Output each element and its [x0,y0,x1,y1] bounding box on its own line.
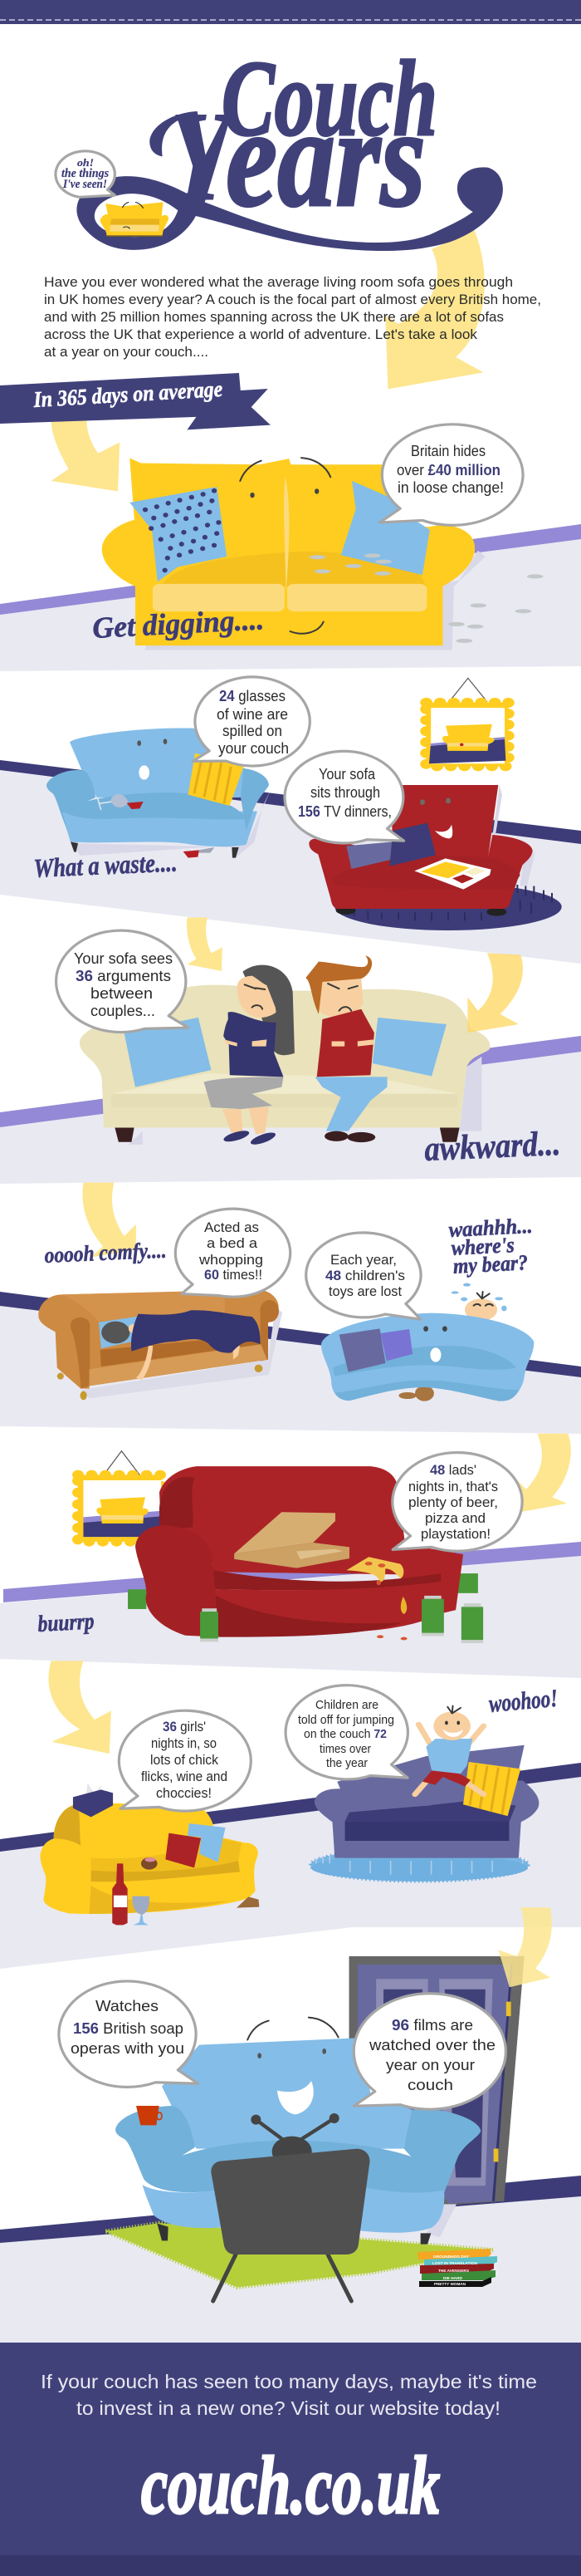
picture frame [78,1451,161,1542]
woman with crossed arms [204,965,295,1147]
beer cans behind sofa [128,1573,478,1609]
panel: arguments [56,917,561,1169]
caption: get digging: Get digging.... [91,602,265,645]
intro text: across the UK that experience a world of adventure. Let's take a look [44,326,477,342]
ribbon: in 365 days on average: In 365 days on average [32,376,223,412]
speech bubble: 40 million: over £40 million [397,462,500,478]
stack of films: LOST IN TRANSLATION [432,2261,478,2265]
arrow: to soaps [498,1907,552,1987]
speech bubble: 156 tv dinners: sits through [310,784,380,801]
man with crossed arms [305,955,388,1142]
caption: awkward: awkward... [423,1125,561,1169]
footer logo: couch.co.uk: couch.co.uk [141,2439,440,2531]
green rug [105,2223,493,2287]
arrow: from title to intro [385,230,485,389]
caption: waahhh where's my bear: where's [451,1233,515,1260]
title: Couch Years: Y [170,85,237,228]
footer call to action: to invest in a new one? Visit our website today! [76,2397,500,2419]
speech bubble: 156 soap operas [59,1981,198,2087]
title: Couch Years: Couch [222,39,437,159]
speech bubble: 36 girls nights: choccies! [156,1785,212,1801]
blue sofa with face and mug [115,2018,481,2245]
intro text: in UK homes every year? A couch is the focal part of almost every British home, [44,292,541,307]
speech bubble: 60 times [175,1209,290,1297]
speech bubble: 60 times: 60 times!! [204,1267,262,1283]
footer panel [0,2343,581,2576]
speech bubble: 36 arguments: couples... [90,1003,155,1019]
red sofa with tv dinner and rug [309,785,562,930]
panel: get digging [91,424,543,650]
speech bubble: oh the things: oh! [77,156,94,169]
speech bubble: 36 girls nights: 36 girls' [163,1719,206,1735]
stack of films: GROUNDHOG DAY [433,2255,469,2259]
cream sofa [80,985,490,1145]
stack of films: THE AVENGERS [438,2269,469,2273]
speech bubble: 60 times: a bed a [207,1235,258,1251]
speech bubble: 36 arguments [56,930,188,1033]
speech bubble: 96 films: year on your [386,2057,475,2073]
panel: girls night and jumping [40,1661,559,1925]
caption: woohoo: woohoo! [488,1685,559,1718]
arrow: to girls night [48,1661,111,1754]
footer call to action [41,2371,537,2419]
speech bubble: 48 toys: toys are lost [329,1283,402,1299]
speech bubble: 36 girls nights: lots of chick [150,1752,218,1768]
caption: buurrp: buurrp [37,1608,95,1637]
speech bubble: jumping 72 times: the year [326,1756,368,1770]
top banner [0,0,581,24]
intro text: at a year on your couch.... [44,344,208,360]
arrow: to lads night [515,1434,571,1513]
arrow: to comfy [82,1183,136,1257]
speech bubble: 96 films: couch [408,2077,453,2093]
speech bubble: oh the things: the things [61,167,109,180]
speech bubble: 156 tv dinners: 156 TV dinners, [298,803,392,820]
ribbon: in 365 days on average [0,373,271,429]
navy sofa with jumping child [315,1706,539,1858]
panel: what a waste [33,677,562,930]
speech bubble: jumping 72 times: times over [320,1742,371,1756]
title: Couch Years: ears [226,79,426,236]
stack of films [417,2249,497,2287]
intro text: Have you ever wondered what the average living room sofa goes through [44,274,513,290]
speech bubble: 24 glasses: of wine are [217,706,288,723]
speech bubble: 96 films [354,1994,505,2109]
title: Couch Years [76,39,503,251]
speech bubble: 48 toys: Each year, [330,1252,397,1268]
stack of films: DIE HARD [443,2276,463,2280]
speech bubble: jumping 72 times: on the couch 72 [304,1727,387,1741]
arrow: overlapping sofa right [467,953,523,1033]
caption: waahhh where's my bear: waahhh... [448,1214,533,1242]
speech bubble: 96 films: watched over the [369,2037,496,2053]
speech bubble: 48 lads nights: plenty of beer, [408,1494,498,1510]
speech bubble: 36 arguments: Your sofa sees [74,950,173,967]
panel: comfy and toys [38,1183,535,1401]
speech bubble: 48 lads nights: pizza and [425,1510,486,1526]
footer call to action: If your couch has seen too many days, maybe it's time [41,2371,537,2392]
speech bubble: 36 girls nights: nights in, so [151,1735,217,1751]
panel: soaps and films [59,1907,552,2301]
arrow: to arguments [187,917,222,971]
speech bubble: 36 arguments: between [90,985,153,1002]
icon: small yellow sofa in title loop [100,202,168,237]
speech bubble: 24 glasses [193,677,310,766]
speech bubble: 40 million: Britain hides [411,443,486,459]
speech bubble: 156 soap operas: Watches [95,1998,159,2014]
picture frame [426,678,509,766]
speech bubble: oh the things [56,151,115,197]
caption: what a waste: What a waste.... [33,846,178,883]
speech bubble: 48 lads nights: 48 lads' [430,1462,476,1478]
arrow: to yellow sofa [51,415,120,491]
speech bubble: 156 soap operas: operas with you [71,2040,184,2057]
yellow sofa with cushions and coins [102,458,543,650]
red sofa with pizza [135,1466,463,1640]
speech bubble: 48 lads nights: playstation! [421,1526,491,1542]
speech bubble: 60 times: whopping [198,1252,263,1268]
blue sofa with spilled wine [46,729,271,858]
blue curved sofa, baby and bear [321,1283,534,1401]
speech bubble: jumping 72 times: told off for jumping [298,1713,394,1727]
speech bubble: 24 glasses: spilled on [222,723,282,739]
speech bubble: 96 films: 96 films are [392,2017,473,2034]
speech bubble: 156 tv dinners: Your sofa [319,766,376,783]
speech bubble: 48 lads nights [393,1453,522,1551]
speech bubble: jumping 72 times: Children are [315,1698,378,1712]
speech bubble: 60 times: Acted as [204,1219,259,1235]
caption: waahhh where's my bear [448,1214,535,1278]
stack of films: PRETTY WOMAN [434,2282,466,2286]
beer cans [200,1596,483,1643]
speech bubble: oh the things: I've seen! [62,178,107,191]
speech bubble: 48 toys: 48 children's [325,1268,405,1283]
speech bubble: 156 tv dinners [285,751,404,843]
caption: ooooh comfy: ooooh comfy.... [44,1238,167,1268]
speech bubble: 40 million [380,424,523,525]
intro text [44,274,541,360]
speech bubble: 36 girls nights: flicks, wine and [141,1769,227,1784]
door [349,1956,525,2206]
tv set [211,2113,369,2301]
speech bubble: 24 glasses: 24 glasses [219,688,286,704]
intro text: and with 25 million homes spanning across the UK there are a lot of sofas [44,309,504,325]
brown sofa with sleeper [38,1290,282,1400]
speech bubble: 36 girls nights [119,1710,251,1811]
blue rug [310,1847,529,1882]
speech bubble: jumping 72 times [286,1685,408,1779]
speech bubble: 156 soap operas: 156 British soap [73,2020,183,2037]
speech bubble: 40 million: in loose change! [398,479,504,496]
speech bubble: 48 toys [306,1233,421,1319]
caption: waahhh where's my bear: my bear? [452,1250,529,1278]
yellow sofa with wine [40,1784,259,1925]
speech bubble: 24 glasses: your couch [218,740,289,757]
speech bubble: 48 lads nights: nights in, that's [408,1479,498,1494]
panel: lads night [37,1434,571,1643]
speech bubble: 36 arguments: 36 arguments [76,968,171,984]
